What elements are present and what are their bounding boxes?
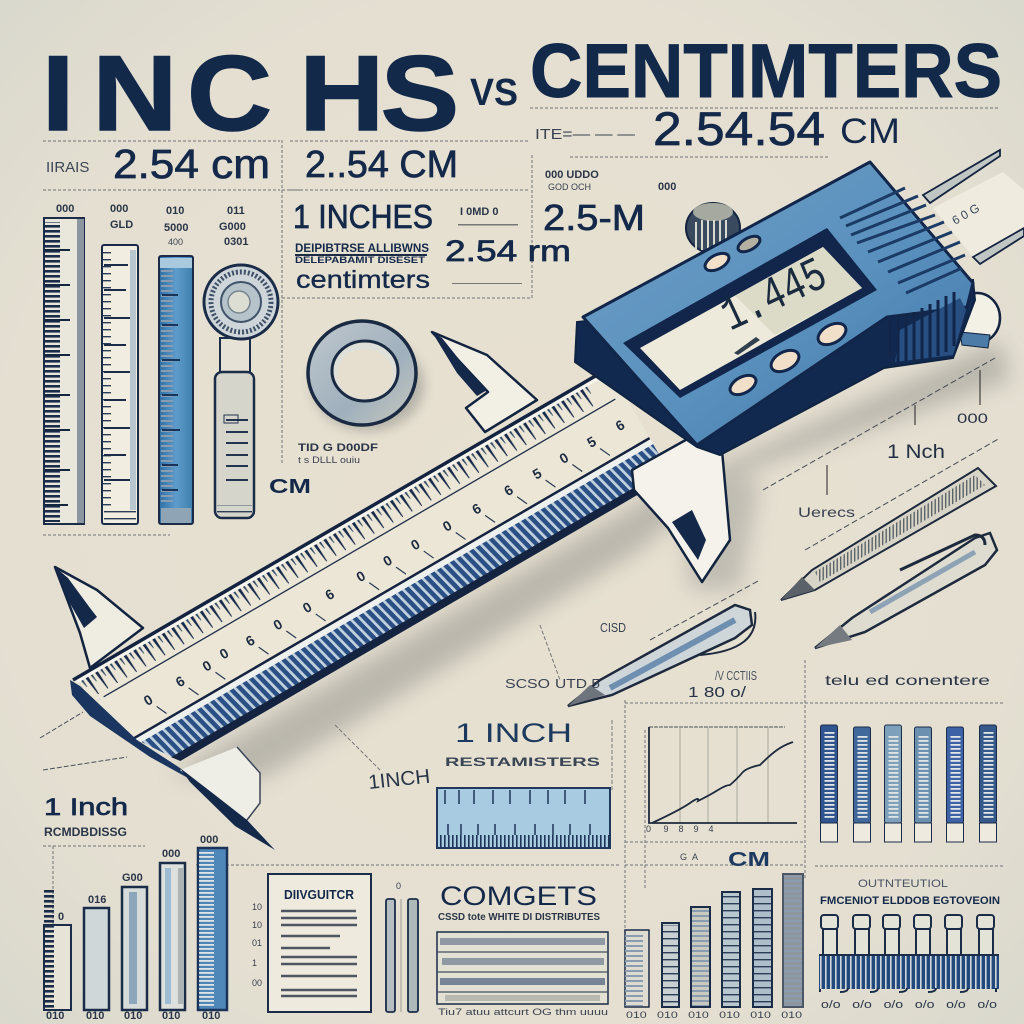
beam scale digits: 0 [141, 691, 156, 709]
beam scale digits: 0 [408, 536, 423, 553]
beam scale digits: 0 [300, 598, 315, 616]
blue ruler [437, 788, 610, 848]
caliper lower jaw movable [632, 432, 730, 582]
bar chart: bottom left rulers: 010 [46, 1010, 64, 1022]
title: INCHS [42, 33, 459, 153]
thin bars: 0 [396, 881, 401, 891]
tape measure tool: 011 [227, 205, 245, 217]
display screen [623, 228, 877, 398]
label: 1 inch bottom left [44, 794, 128, 839]
panel: 1 inches definition: DEIPIBTRSE ALLIBWNS [295, 241, 429, 255]
display reading: 1.445 [714, 249, 836, 345]
ruler 3: 010 [166, 205, 184, 217]
caliper upper jaw fixed [55, 567, 143, 668]
bar chart: bottom left rulers: G00 [122, 872, 143, 884]
caliper body [575, 162, 975, 455]
label: cm mid [680, 849, 770, 871]
heading: comgets: COMGETS [440, 881, 597, 911]
line chart: 0 9 8 9 4 [646, 824, 714, 834]
caliper shadow [170, 340, 1010, 780]
beam scale digits: 5 [530, 465, 545, 482]
heading: conversion value top right [535, 102, 900, 155]
panel: 2.5 m note: 000 UDDO [545, 169, 599, 181]
document card: 10 [252, 920, 262, 930]
striped bar chart: 010 010 010 010 010 010 [626, 1010, 802, 1020]
title [42, 29, 1002, 153]
bottom right scale diagram: OUTNTEUTIOL [858, 878, 948, 890]
bar chart: bottom left rulers: 0 [58, 911, 64, 923]
centre small labels [335, 620, 626, 790]
panel: 2.54 cm heading left: 2.54 cm [113, 141, 270, 187]
pen: clip pen right [815, 533, 997, 648]
beam scale digits: 6 [613, 416, 628, 434]
beam scale digits: 6 [243, 632, 258, 649]
label: 1 inch bottom left: 1 Inch [44, 794, 128, 821]
panel: 2.54 cm heading centre: 2..54 CM [305, 144, 458, 186]
label: 1 inch centre [445, 718, 600, 769]
caption under washer: t s DLLL ouiu [298, 455, 360, 465]
label: cm: CM [269, 476, 311, 498]
bottom right scale diagram: FMCENIOT ELDDOB EGTOVEOIN [820, 895, 1000, 907]
beam scale digits: 0 [217, 644, 232, 662]
fingers [821, 915, 994, 956]
ribs [840, 188, 965, 293]
beam scale digits: 0 [556, 449, 571, 467]
heading: conversion value top right: 2.54.54 [653, 102, 825, 155]
ruler 3: 5000 [164, 222, 188, 234]
document card: 1 [252, 958, 257, 968]
title: VS [470, 72, 518, 114]
panel: 1 inches definition [293, 198, 571, 294]
right roller [954, 293, 1000, 348]
panel: 2.54 cm heading left [46, 141, 270, 187]
heading: conversion value top right: CM [840, 112, 900, 151]
panel: 1 inches definition: centimters [296, 266, 430, 294]
panel: 1 inches definition: DELEPABAMIT DISESET [295, 255, 426, 265]
heading: comgets [438, 881, 600, 923]
pen: centre pen [568, 605, 755, 706]
label: uerecs: Uerecs [798, 504, 855, 520]
document card: 10 [252, 902, 262, 912]
label: cm mid: CM [728, 849, 770, 871]
blue pencils chart [820, 725, 996, 842]
tape measure tool: G000 [219, 221, 246, 233]
pen: knurled pencil [781, 468, 996, 600]
beam scale digits: 6 [322, 585, 337, 603]
ruler 1: 000 [56, 203, 74, 215]
beam scale digits: 5 [584, 433, 599, 451]
bar chart: bottom left rulers: 010 [202, 1010, 220, 1022]
panel: 2.5 m note: GOD OCH [548, 182, 591, 192]
beam scale digits: 6 [501, 481, 516, 499]
dimension leaders right [650, 358, 1000, 640]
panel: 2.5 m note [543, 169, 676, 238]
beam scale digits: 0 [199, 657, 214, 675]
label: 1 inch centre: RESTAMISTERS [445, 755, 600, 769]
label: 1 cms: 1 80 o/ [688, 684, 747, 701]
heading: conversion value top right: ITE=— — — [535, 126, 635, 143]
line chart [646, 727, 797, 834]
document card: 01 [252, 938, 262, 948]
beam scale digits: 0 [353, 567, 368, 585]
panel: 2.5 m note: 2.5-M [543, 197, 645, 238]
centre small labels: CISD [600, 620, 626, 635]
caliper lower jaw fixed [180, 747, 275, 850]
ruler 2: GLD [110, 219, 133, 231]
label: 1 inch slanted: 1INCH [367, 766, 431, 794]
striped bar chart [625, 874, 803, 1020]
bar chart: bottom left rulers: 010 [86, 1010, 104, 1022]
bar chart: bottom left rulers: 000 [200, 834, 218, 846]
beam left end dark side [70, 680, 188, 778]
label: 1 cms [688, 668, 757, 701]
panel: 1 inches definition: I 0MD 0 [460, 206, 499, 218]
ruler 3: 400 [168, 237, 183, 247]
beam scale digits: 6 [173, 672, 188, 690]
beam scale digits: 0 [440, 517, 455, 535]
caliper rear beam: 6 0 G [950, 201, 982, 228]
caliper beam [73, 368, 671, 787]
document card [252, 874, 371, 1012]
document card: DIIVGUITCR [284, 887, 355, 902]
ruler 2 [102, 203, 138, 524]
beam scale digits: 6 [469, 500, 484, 518]
table [437, 932, 608, 1017]
bar chart: bottom left rulers [44, 834, 227, 1022]
label: 1 inch right: 1 Nch [887, 442, 945, 463]
bottom right scale diagram: o/o o/o o/o o/o o/o o/o [821, 999, 997, 1011]
panel: 2.5 m note: 000 [658, 181, 676, 193]
label: 1 cms: /V CCTIIS [715, 668, 757, 683]
label: 1 inch centre: 1 INCH [455, 718, 572, 748]
centre small labels: UTD 5 [555, 676, 600, 691]
panel: 2.54 cm heading left: IIRAIS [46, 159, 89, 176]
beam scale digits: 0 [270, 615, 285, 633]
bottom right scale diagram [819, 878, 1000, 1011]
ruler 3 [159, 205, 193, 524]
panel: 1 inches definition: 2.54 rm [445, 235, 571, 268]
label: 000 right: 000 [957, 410, 988, 426]
bar chart: bottom left rulers: 010 [124, 1010, 142, 1022]
tape measure tool: 0301 [224, 236, 248, 248]
tape measure tool [204, 205, 278, 518]
panel: vertical rulers [44, 203, 278, 524]
document card: 00 [252, 978, 262, 988]
label: 1 inch bottom left: RCMDBDISSG [44, 825, 127, 839]
caption under washer [298, 442, 378, 465]
washer [308, 321, 424, 431]
label: tele ed conentere: telu ed conentere [825, 672, 990, 688]
thumb wheel [686, 203, 740, 253]
title: CENTIMTERS [530, 29, 1002, 114]
bar chart: bottom left rulers: 000 [162, 848, 180, 860]
buttons [702, 233, 849, 399]
caption under washer: TID G D00DF [298, 442, 378, 454]
caliper upper jaw movable [432, 332, 537, 432]
thin bars [386, 881, 418, 1012]
table: Tiu7 atuu attcurt OG thm uuuu [438, 1007, 608, 1017]
beam scale digits: 0 [380, 552, 395, 569]
caliper rear beam [923, 150, 1024, 264]
beam scale digits [140, 415, 628, 709]
leader lines left [40, 712, 127, 770]
ruler 1 [45, 203, 84, 523]
centre small labels: SCSO [505, 676, 550, 691]
panel: 1 inches definition: 1 INCHES [293, 198, 433, 235]
ruler 2: 000 [110, 203, 128, 215]
bar chart: bottom left rulers: 010 [162, 1010, 180, 1022]
bar chart: bottom left rulers: 016 [88, 894, 106, 906]
heading: comgets: CSSD tote WHITE DI DISTRIBUTES [438, 912, 600, 923]
label: cm mid: G A [680, 852, 698, 862]
